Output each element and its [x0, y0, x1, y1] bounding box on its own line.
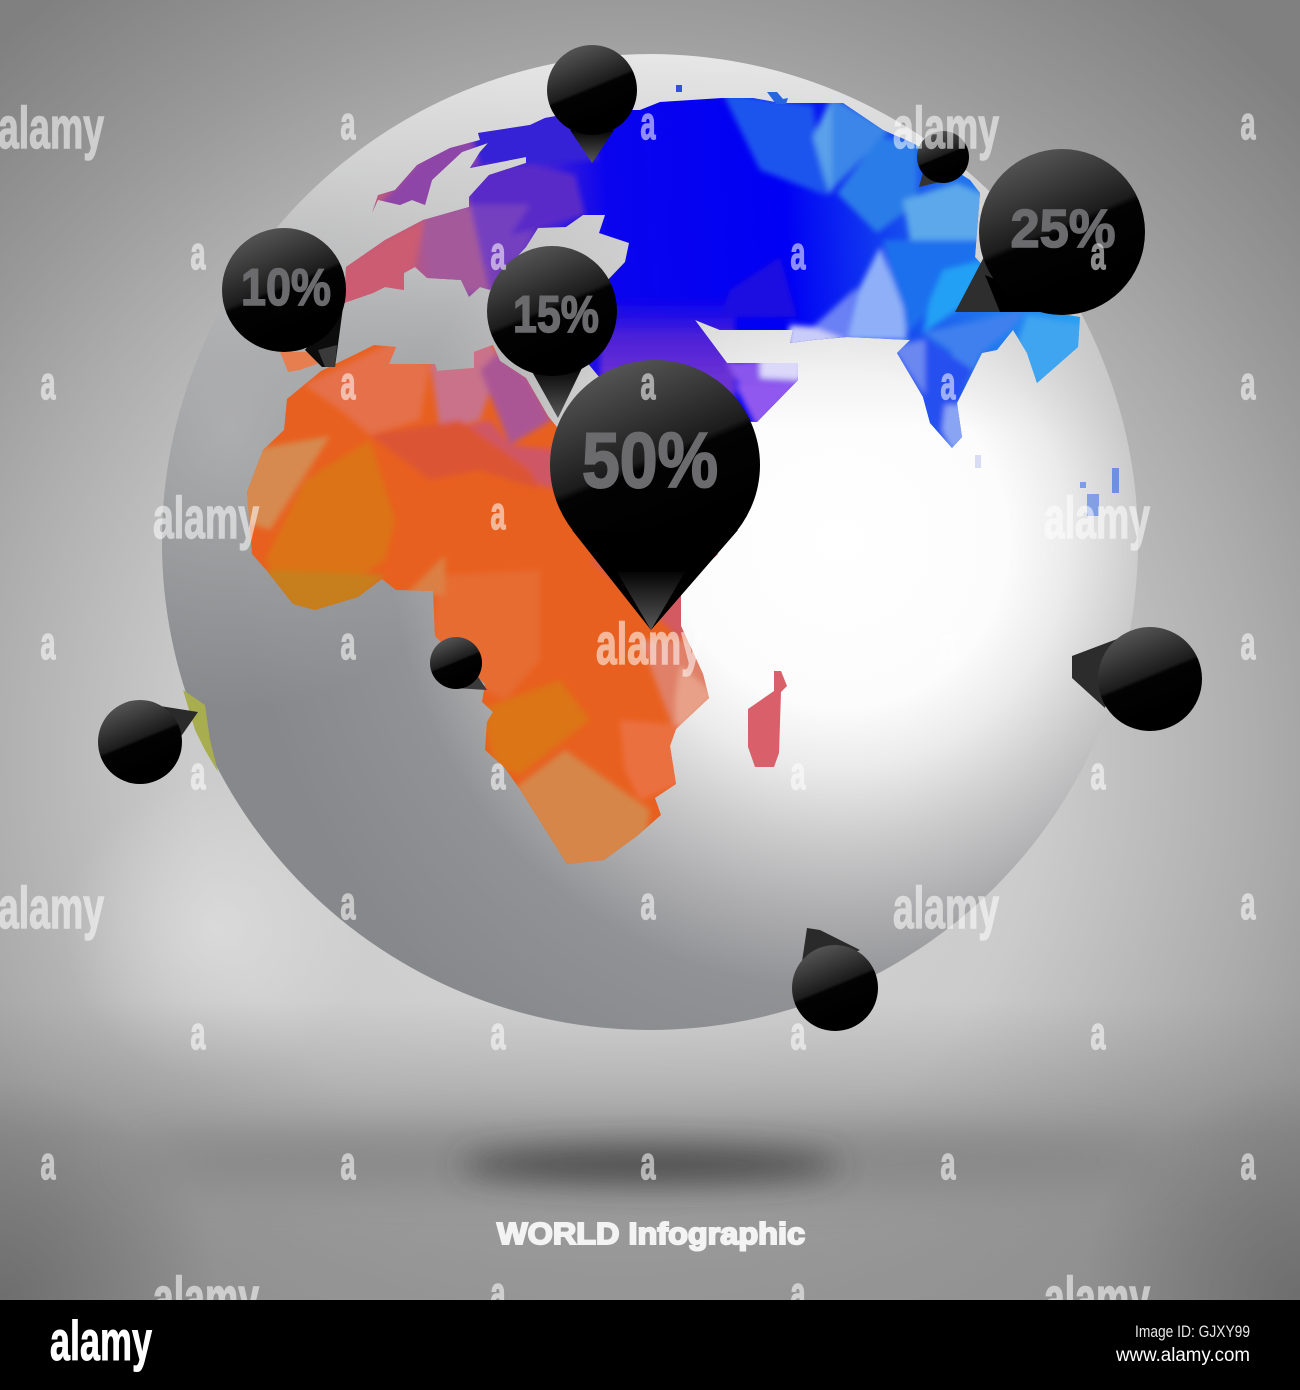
pin: right	[1072, 627, 1202, 731]
ground shadow	[130, 1130, 1170, 1190]
watermarks: a	[190, 227, 206, 279]
watermarks: a	[940, 617, 956, 669]
watermarks: a	[340, 357, 356, 409]
watermarks: a	[790, 1267, 806, 1319]
watermarks: a	[1240, 97, 1256, 149]
watermarks: a	[940, 1137, 956, 1189]
watermarks: a	[640, 357, 656, 409]
pin: top	[547, 45, 637, 163]
footer logo: alamy	[50, 1309, 152, 1372]
pin: left	[98, 700, 198, 784]
watermarks: a	[340, 97, 356, 149]
title: WORLD Infographic	[497, 1216, 805, 1251]
pin: small upper right	[917, 131, 969, 187]
island specks	[676, 85, 1119, 516]
Madagascar	[748, 671, 787, 767]
watermarks: alamy	[893, 876, 999, 941]
watermarks: a	[40, 357, 56, 409]
pin: 50 percent	[550, 360, 760, 630]
pin: 25 percent	[955, 149, 1145, 315]
watermarks: a	[340, 617, 356, 669]
watermarks: alamy	[1044, 486, 1150, 551]
watermarks: a	[640, 1137, 656, 1189]
watermarks: a	[790, 227, 806, 279]
watermarks: a	[940, 357, 956, 409]
label: 50%: 50%	[582, 416, 718, 504]
label: 25%: 25%	[1010, 199, 1116, 259]
watermarks: alamy	[0, 876, 104, 941]
watermarks: alamy	[893, 96, 999, 161]
watermarks: a	[1240, 877, 1256, 929]
globe sphere	[162, 54, 1138, 1030]
website: www.alamy.com	[1115, 1345, 1250, 1366]
watermarks: a	[490, 227, 506, 279]
watermarks: alamy	[153, 486, 259, 551]
watermarks: a	[40, 1137, 56, 1189]
watermarks: a	[640, 877, 656, 929]
label: 15%: 15%	[513, 286, 599, 344]
watermarks: alamy	[0, 96, 104, 161]
watermarks: alamy	[1044, 1266, 1150, 1331]
north Africa fragment	[280, 352, 322, 372]
footer bar	[0, 1300, 1300, 1390]
watermarks: a	[640, 97, 656, 149]
pin: 15 percent	[487, 246, 617, 418]
watermarks: a	[340, 1137, 356, 1189]
Americas fragment	[183, 690, 218, 772]
image id: Image ID: GJXY99	[1135, 1322, 1250, 1341]
watermarks: a	[40, 617, 56, 669]
watermarks: a	[1240, 617, 1256, 669]
watermarks: a	[1240, 357, 1256, 409]
watermarks: a	[340, 877, 356, 929]
watermarks: a	[1090, 227, 1106, 279]
watermarks: a	[490, 747, 506, 799]
watermarks: a	[1090, 1007, 1106, 1059]
pin: small center	[430, 637, 487, 690]
watermarks: a	[790, 747, 806, 799]
watermarks: a	[790, 1007, 806, 1059]
watermarks: alamy	[596, 612, 702, 677]
watermarks: a	[490, 487, 506, 539]
continent: Africa	[240, 340, 725, 870]
watermarks: a	[1090, 747, 1106, 799]
pin: 10 percent	[222, 228, 346, 367]
watermarks: a	[790, 487, 806, 539]
watermarks: a	[490, 1007, 506, 1059]
watermarks: a	[490, 1267, 506, 1319]
watermarks: a	[190, 1007, 206, 1059]
continent: Europe and Asia	[340, 90, 1100, 460]
watermarks: a	[1240, 1137, 1256, 1189]
pin: bottom	[792, 928, 878, 1031]
watermarks: a	[190, 747, 206, 799]
label: 10%: 10%	[241, 259, 331, 317]
watermarks: alamy	[153, 1266, 259, 1331]
